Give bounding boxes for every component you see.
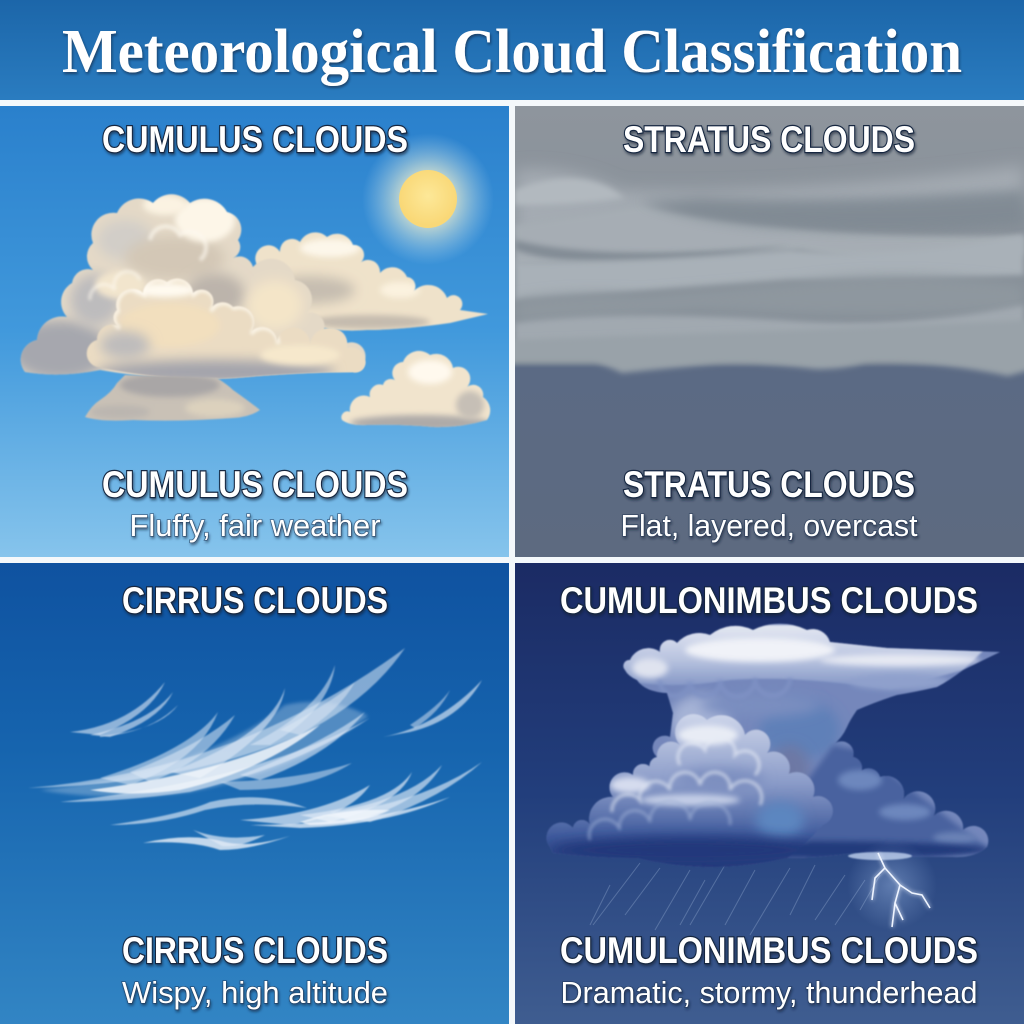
- cirrus wisps: [28, 648, 482, 850]
- label: STRATUS CLOUDS: [623, 464, 915, 505]
- description: Dramatic, stormy, thunderhead: [560, 975, 978, 1010]
- label: CUMULUS CLOUDS: [102, 464, 408, 505]
- description: Fluffy, fair weather: [130, 508, 380, 543]
- label: CUMULONIMBUS CLOUDS: [560, 930, 978, 971]
- icon: sun: [362, 133, 494, 265]
- thunderhead cloud: [547, 624, 1010, 870]
- heading: STRATUS CLOUDS: [623, 119, 915, 160]
- heading: CIRRUS CLOUDS: [122, 580, 388, 621]
- front lit puff: [547, 714, 833, 867]
- heading: CUMULONIMBUS CLOUDS: [560, 580, 978, 621]
- description: Flat, layered, overcast: [620, 508, 918, 543]
- front cumulus puff: [87, 278, 365, 384]
- small right cloud: [341, 351, 490, 431]
- lower flat cloud: [85, 373, 260, 421]
- icon: lightning bolt: [848, 847, 933, 930]
- stratus cloud layers: [505, 165, 1024, 376]
- rain: [590, 863, 880, 935]
- anvil: [622, 624, 983, 685]
- title: Meteorological Cloud Classification: [62, 18, 962, 86]
- right dark flank: [807, 744, 987, 857]
- main cumulus cloud: [10, 194, 366, 380]
- description: Wispy, high altitude: [122, 975, 388, 1010]
- heading: CUMULUS CLOUDS: [102, 119, 408, 160]
- panel: cumulonimbus clouds: [515, 563, 1024, 1024]
- panel: cirrus clouds: [0, 563, 509, 1024]
- panel: stratus clouds: [505, 106, 1024, 557]
- right cumulus cloud: [255, 232, 488, 331]
- tower shading: [670, 690, 842, 776]
- title banner: [0, 0, 1024, 100]
- label: CIRRUS CLOUDS: [122, 930, 388, 971]
- panel: cumulus clouds: [0, 106, 509, 557]
